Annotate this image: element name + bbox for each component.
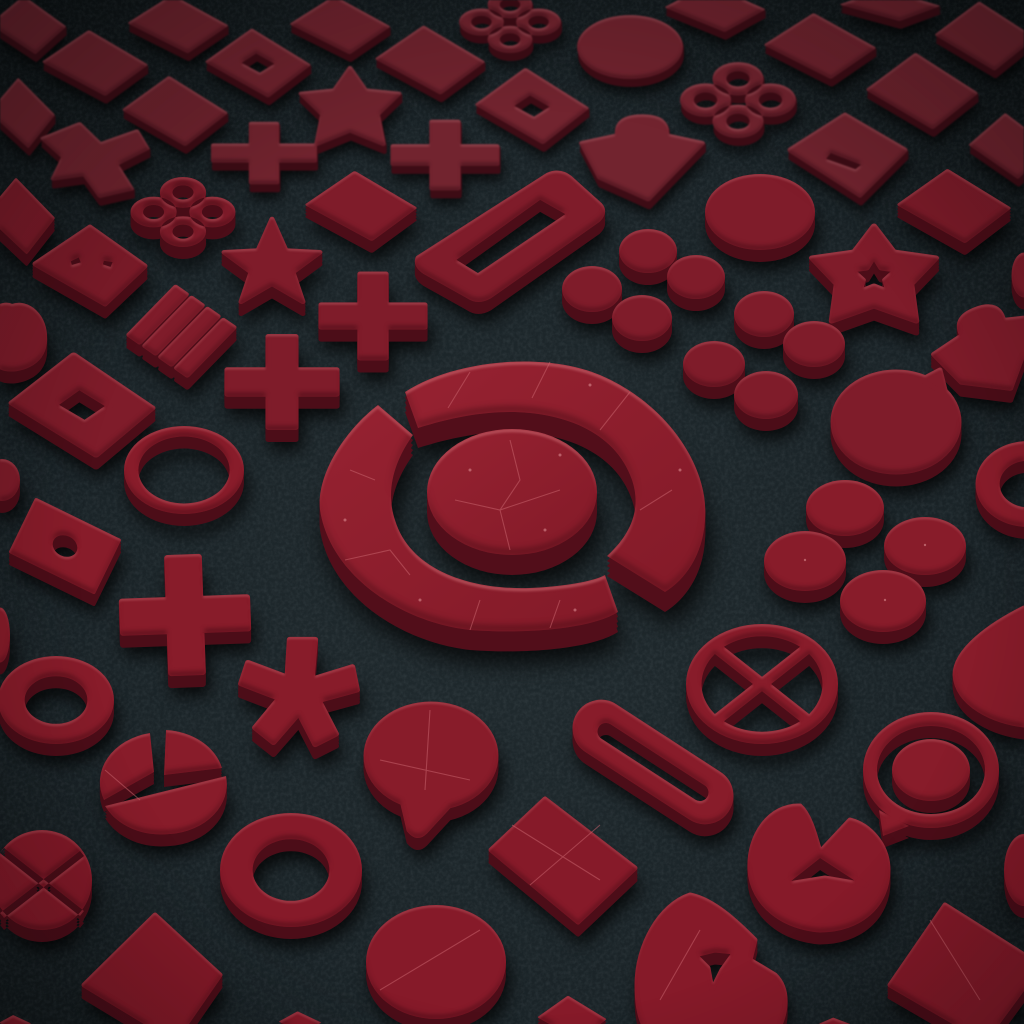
icon: disc cluster B: [683, 291, 845, 419]
icon: left edge: [0, 608, 10, 662]
middle symbols: [0, 171, 1024, 501]
icon: disc: [705, 174, 815, 250]
icon: disc: [577, 15, 683, 79]
icon: disc cluster C: [764, 480, 966, 632]
icon: bottom fragment: [280, 1012, 320, 1024]
icon: diamond: [668, 0, 762, 30]
icon: small block hole: [11, 500, 119, 592]
icon: ring: [220, 813, 362, 927]
central lower arc: [320, 405, 618, 631]
icon: block right: [971, 115, 1024, 177]
icon: disc cluster A: [562, 229, 725, 341]
icon: disc: [366, 905, 506, 1019]
icon: blob left: [0, 304, 45, 370]
icon: bottom fragment: [0, 1016, 30, 1024]
icon: block: [869, 55, 975, 127]
icon: block: [767, 15, 873, 77]
icon: star cross: [301, 68, 399, 144]
icon: stripes: [129, 287, 234, 375]
icon: petal disc: [750, 806, 888, 930]
icon: diamond left: [0, 80, 53, 146]
icon: star outline: [812, 226, 936, 321]
icon: cross: [214, 123, 314, 183]
icon: rounded frame: [417, 173, 603, 300]
icon: diamond left: [0, 180, 53, 252]
icon: diamond: [292, 0, 388, 52]
foreground symbols: [0, 799, 1024, 1024]
icon: cross: [393, 121, 497, 189]
central disc: [427, 429, 597, 555]
icon: patterned diamond: [45, 32, 145, 94]
icon: flower rings: [130, 177, 236, 247]
icon: ring: [0, 656, 114, 744]
icon: slotted pill: [565, 692, 741, 832]
icon: square with hole: [12, 355, 152, 455]
surface specks: [344, 384, 926, 612]
icon: diamond: [308, 173, 414, 239]
icon: diamond with cracks: [491, 799, 635, 922]
icon: crossed ring: [686, 624, 838, 744]
icon: partial ring right: [976, 441, 1024, 527]
far row symbols: [0, 0, 1024, 199]
icon: split disc: [100, 730, 227, 835]
surface scratches: [105, 362, 980, 1000]
icon: disc with tail: [366, 704, 496, 836]
icon: diamond top-left: [0, 0, 64, 52]
icon: bottom fragment: [540, 997, 604, 1024]
icon: hollow diamond: [208, 30, 308, 95]
icon: block: [938, 3, 1024, 68]
icon: quartered disc: [0, 830, 92, 930]
icon: cross: [121, 555, 249, 675]
icon: thin ring: [124, 426, 244, 514]
icon: ring with inner disc: [863, 712, 999, 836]
near symbols: [0, 426, 1024, 836]
icon: leaf: [955, 608, 1024, 725]
icon: block: [842, 0, 938, 20]
icon: block: [900, 171, 1008, 241]
icon: cracked blob: [637, 895, 785, 1024]
icon: diamond two holes: [35, 227, 145, 304]
icon: x-shape: [43, 124, 147, 196]
icon: edge disc: [1004, 834, 1024, 906]
icon: apple disc: [833, 370, 959, 472]
icon: asterisk: [241, 640, 357, 744]
icon: bottom fragment: [820, 1018, 850, 1024]
central logo: [320, 361, 705, 631]
icon: diamond top: [130, 0, 226, 51]
icon: flower rings: [459, 0, 561, 53]
icon: cross: [227, 336, 337, 428]
icon: diamond: [378, 27, 482, 92]
icon: heart shape: [582, 116, 702, 199]
icon: diamond: [125, 78, 225, 144]
icon: fan block: [924, 290, 1024, 409]
icon: small left: [0, 459, 20, 501]
icon: stripes block: [790, 115, 905, 195]
icon: star: [224, 219, 320, 302]
icon: flower rings: [680, 62, 796, 138]
icon: square hole: [478, 70, 586, 142]
icon: diamond: [84, 915, 220, 1024]
icon: partial right: [1012, 252, 1024, 298]
icon: cross: [321, 274, 425, 358]
icon: diamond: [890, 905, 1024, 1024]
central upper arc: [405, 361, 705, 592]
